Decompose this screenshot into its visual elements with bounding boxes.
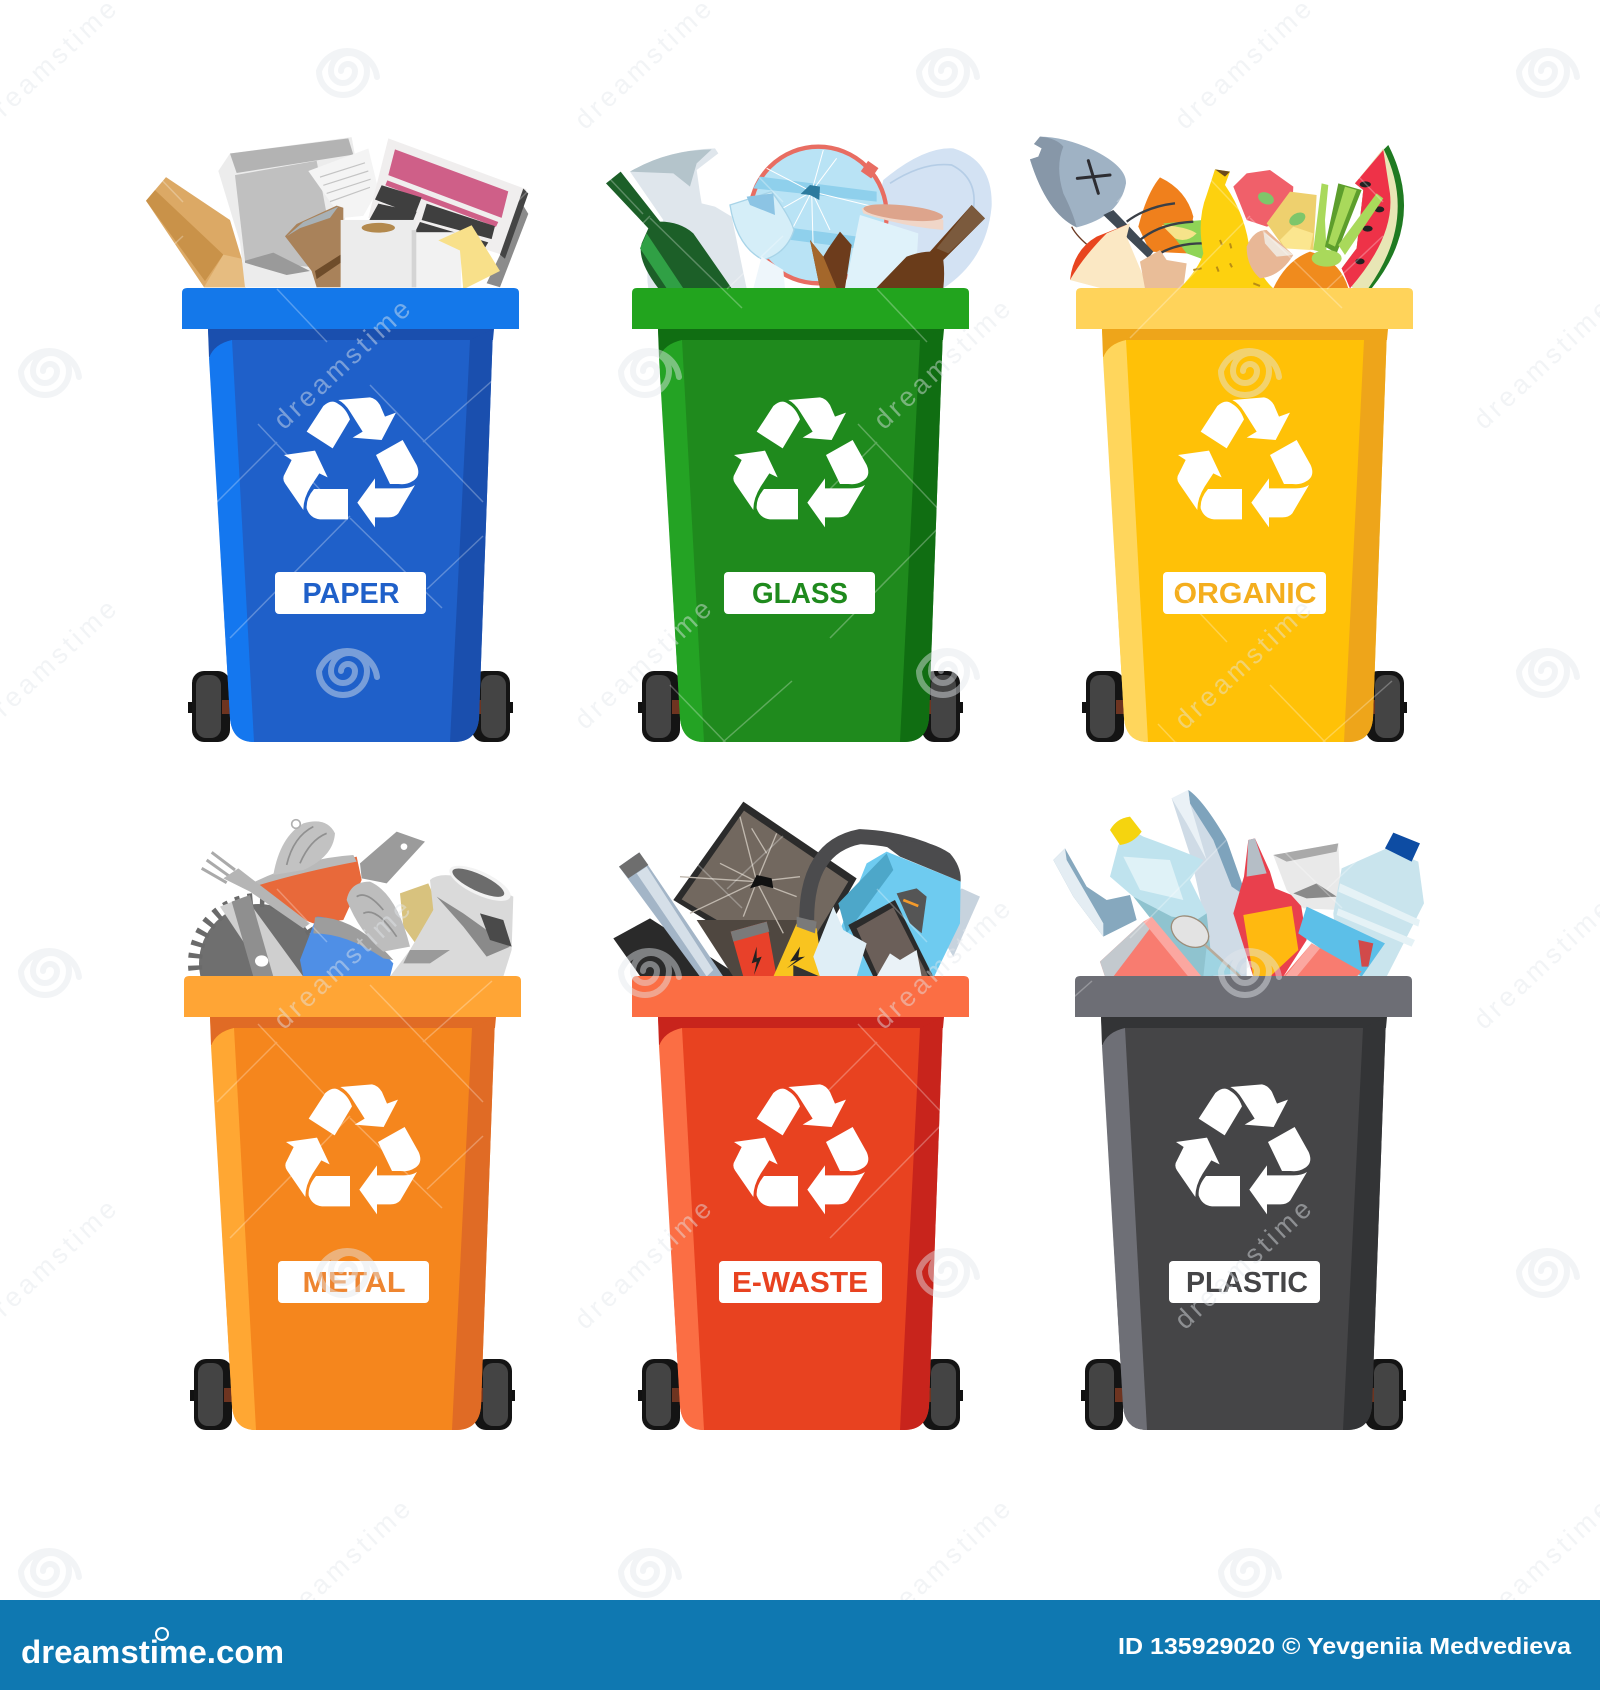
- bin body: gray: [1075, 976, 1412, 1430]
- label: ORGANIC: ORGANIC: [1174, 578, 1317, 610]
- label: PAPER: PAPER: [302, 578, 400, 610]
- icon: recycling symbol: [285, 1084, 420, 1214]
- panel: e-waste bin: [613, 802, 980, 1430]
- footer logo: dreamstime.com: dreamstime.com: [21, 1634, 284, 1670]
- label: PAPER: [275, 572, 426, 614]
- watermark layer: dreamstime: [868, 294, 1016, 435]
- icon: recycling symbol: [1177, 397, 1312, 527]
- illustration: metal waste: [195, 820, 515, 1027]
- label: PLASTIC: PLASTIC: [1186, 1267, 1308, 1299]
- bin body: orange: [184, 976, 521, 1430]
- label: ORGANIC: [1163, 572, 1326, 614]
- illustration: electronic waste: [613, 802, 980, 978]
- icon: recycling symbol: [733, 1084, 868, 1214]
- label: E-WASTE: [719, 1261, 882, 1303]
- watermark layer: dreamstime: [268, 1494, 416, 1635]
- illustration: glass waste: [606, 147, 992, 288]
- label: GLASS: [724, 572, 875, 614]
- panel: paper bin: [146, 137, 528, 742]
- label: E-WASTE: E-WASTE: [732, 1267, 868, 1299]
- bin body: green: [632, 288, 969, 742]
- watermark layer: dreamstime: [268, 294, 416, 435]
- label: GLASS: GLASS: [752, 578, 848, 610]
- bin body: yellow: [1076, 288, 1413, 742]
- panel: metal bin: [184, 820, 521, 1430]
- panel: glass bin: [606, 147, 992, 742]
- watermark layer: dreamstime: [569, 1194, 717, 1335]
- label: METAL: METAL: [302, 1267, 406, 1299]
- icon: recycling symbol: [1175, 1084, 1310, 1214]
- bin body: blue: [182, 288, 519, 742]
- watermark layer: dreamstime: [868, 894, 1016, 1035]
- illustration: organic waste: [1030, 137, 1404, 288]
- label: PLASTIC: [1169, 1261, 1320, 1303]
- panel: plastic bin: [1053, 790, 1424, 1430]
- panel: organic bin: [1030, 137, 1413, 742]
- label: METAL: [278, 1261, 429, 1303]
- watermark layer: dreamstime: [868, 1494, 1016, 1635]
- footer bar: [0, 1600, 1600, 1690]
- icon: recycling symbol: [733, 397, 868, 527]
- icon: recycling symbol: [283, 397, 418, 527]
- watermark layer: dreamstime: [569, 594, 717, 735]
- illustration: paper waste: [146, 137, 528, 289]
- bin body: red: [632, 976, 969, 1430]
- watermark layer: dreamstime: [1169, 594, 1317, 735]
- footer credit: ID 135929020 © Yevgeniia Medvedieva: [1118, 1633, 1571, 1659]
- watermark layer: dreamstime: [268, 894, 416, 1035]
- illustration: plastic waste: [1053, 790, 1424, 977]
- watermark layer: dreamstime: [1169, 1194, 1317, 1335]
